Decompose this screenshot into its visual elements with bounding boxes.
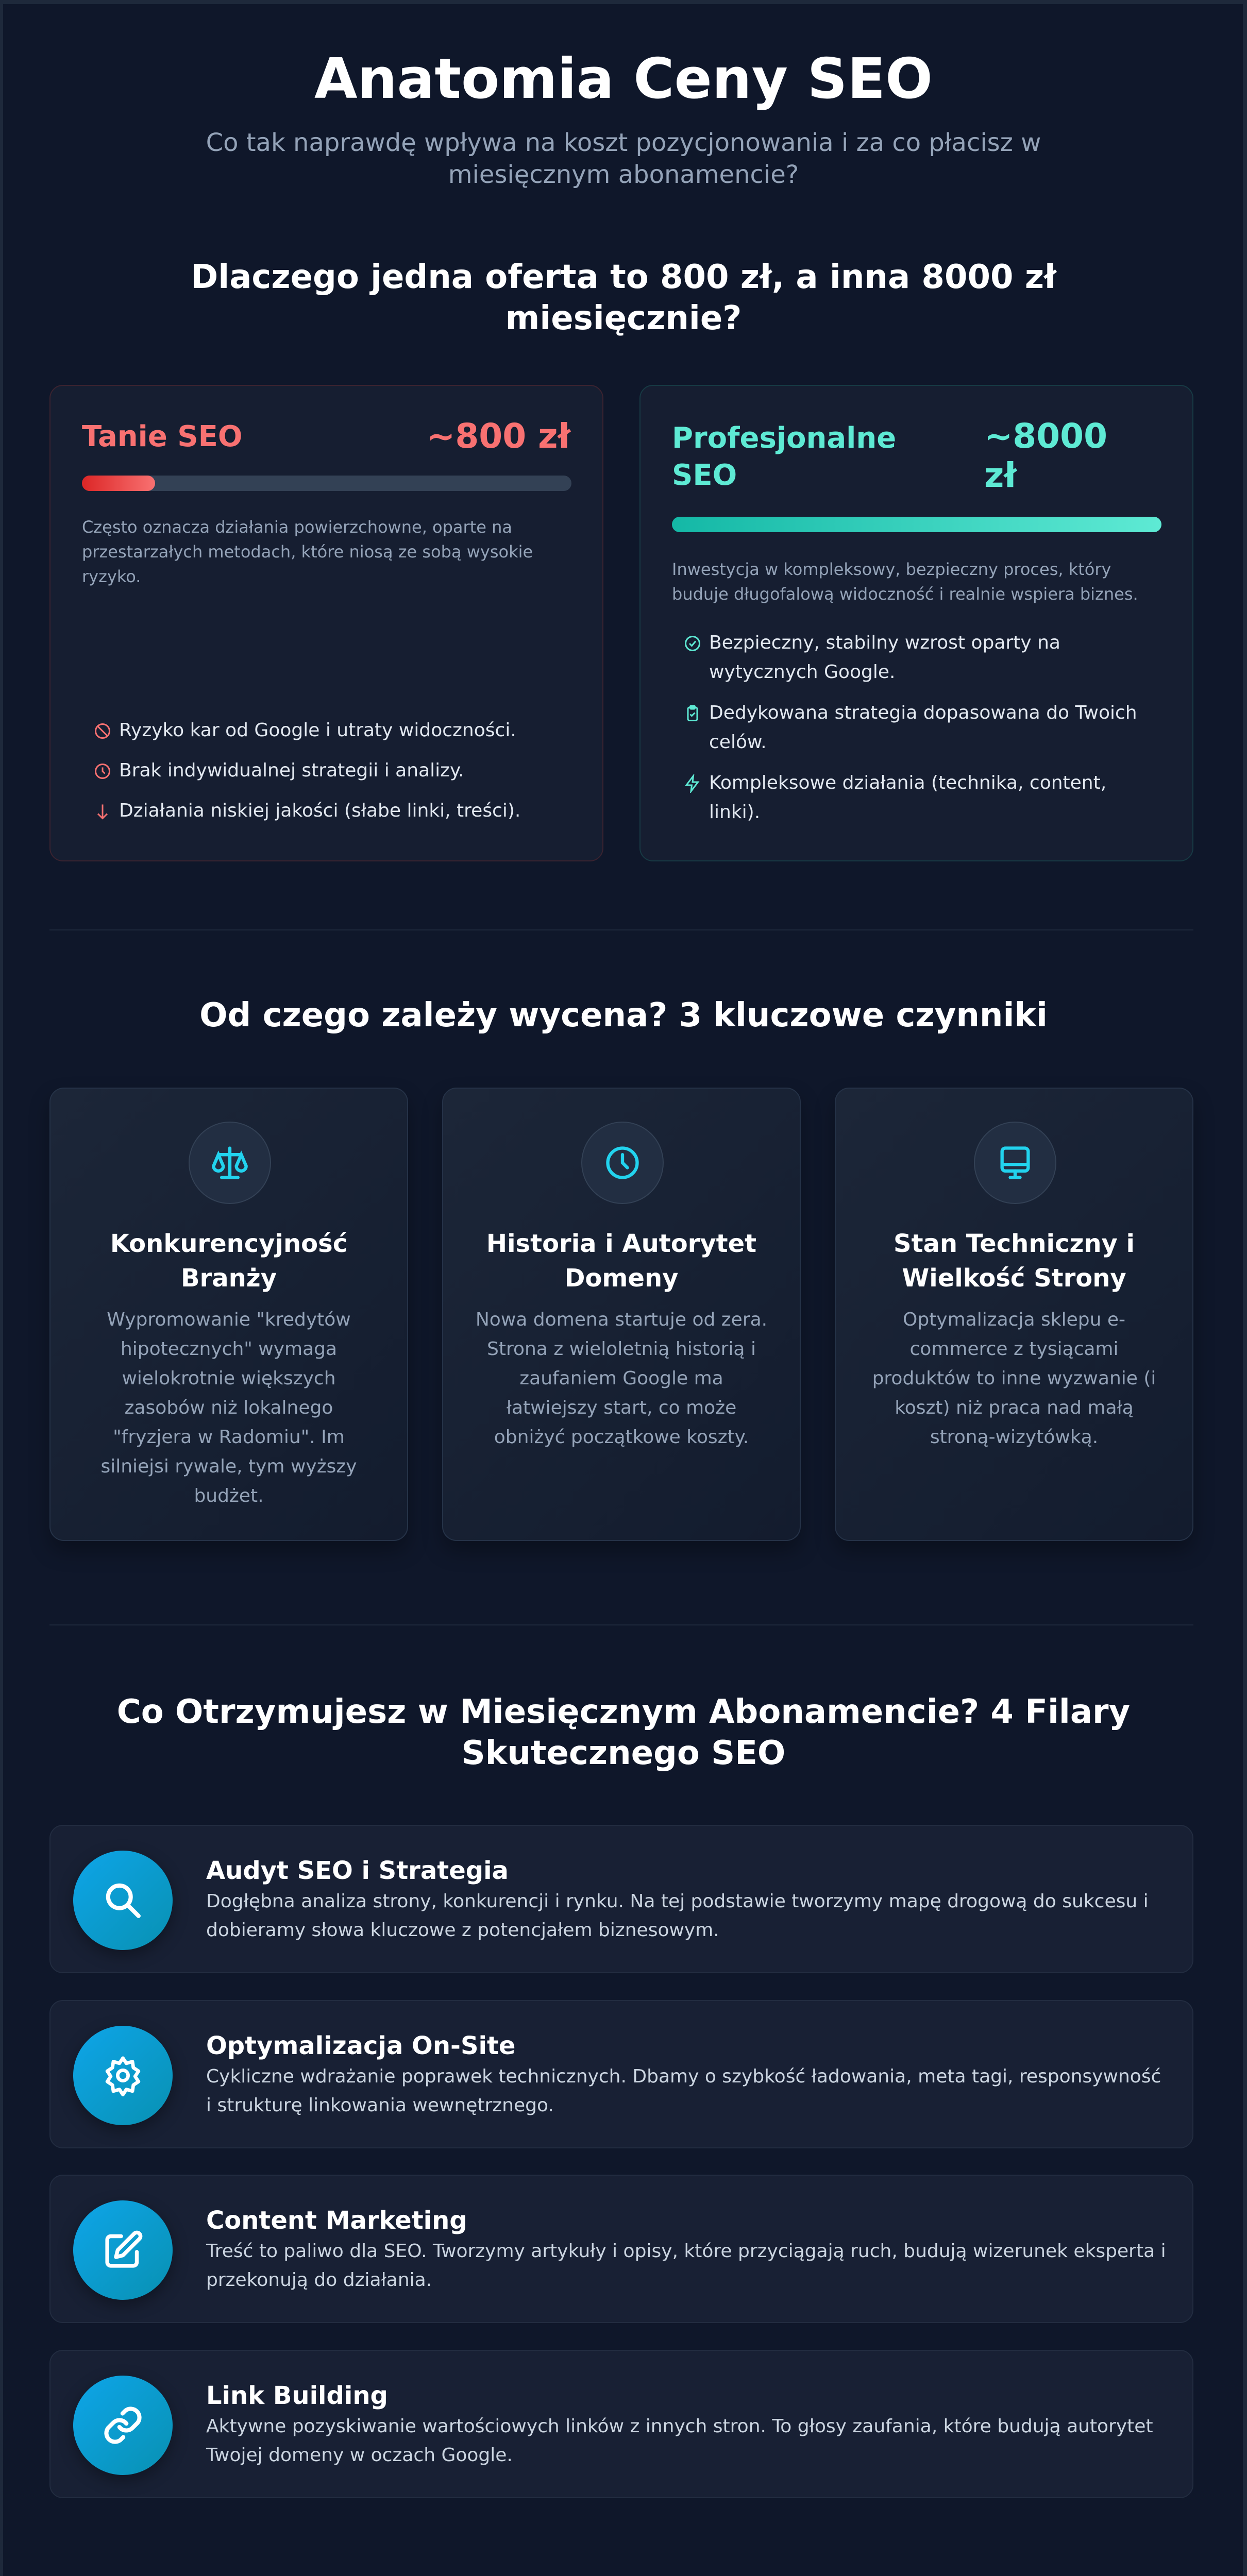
- pro title: [672, 421, 896, 492]
- benefit: safe growth: Bezpieczny, stabilny wzrost oparty na: [709, 632, 1060, 653]
- heading: price comparison: Dlaczego jedna oferta to 800 zł, a inna 8000 zł: [191, 258, 1056, 296]
- factor text: commerce z tysiącami: [910, 1338, 1118, 1360]
- cheap risk list: [95, 720, 520, 821]
- icon: edit: [73, 2200, 173, 2300]
- pro price: ~8000: [984, 416, 1107, 456]
- icon: link: [73, 2376, 173, 2475]
- risk: no strategy: Brak indywidualnej strategii i analizy.: [119, 760, 464, 781]
- icon: clock: [581, 1122, 664, 1204]
- benefit: dedicated strategy: celów.: [709, 732, 767, 753]
- factor title: [486, 1229, 756, 1293]
- cheap description: [82, 517, 533, 586]
- factor title: Wielkość Strony: [902, 1264, 1126, 1293]
- heading: pillars: Co Otrzymujesz w Miesięcznym Abonamencie? 4 Filary: [117, 1693, 1130, 1731]
- factor text: obniżyć początkowe koszty.: [494, 1427, 749, 1448]
- cheap description: Często oznacza działania powierzchowne, oparte na: [82, 517, 512, 537]
- pro title: SEO: [672, 459, 737, 492]
- factor text: stroną-wizytówką.: [930, 1427, 1098, 1448]
- pillar title: Optymalizacja On-Site: [206, 2031, 515, 2060]
- risk: low quality: Działania niskiej jakości (słabe linki, treści).: [119, 800, 520, 821]
- pillar text: [206, 1891, 1149, 1941]
- factor title: [894, 1229, 1135, 1293]
- factor text: łatwiejszy start, co może: [507, 1397, 736, 1418]
- benefit: complex actions: [685, 772, 1106, 823]
- factor card: technical state: [835, 1088, 1193, 1541]
- factor card: domain history: [442, 1088, 801, 1541]
- icon: monitor: [974, 1122, 1056, 1204]
- icon: scales: [189, 1122, 271, 1204]
- pro description: buduje długofalową widoczność i realnie wspiera biznes.: [672, 584, 1138, 604]
- cheap description: przestarzałych metodach, które niosą ze sobą wysokie: [82, 542, 533, 562]
- pillar text: Dogłębna analiza strony, konkurencji i rynku. Na tej podstawie tworzymy mapę drogową do sukcesu i: [206, 1891, 1149, 1912]
- pillar text: i strukturę linkowania wewnętrznego.: [206, 2095, 554, 2116]
- factor text: [476, 1309, 767, 1448]
- factor text: Optymalizacja sklepu e-: [903, 1309, 1125, 1330]
- factor text: [100, 1309, 357, 1506]
- heading: price comparison: miesięcznie?: [505, 299, 742, 337]
- pillar text: przekonują do działania.: [206, 2269, 432, 2291]
- factor text: produktów to inne wyzwanie (i: [872, 1368, 1156, 1389]
- factor title: Domeny: [565, 1264, 678, 1293]
- benefit: complex actions: Kompleksowe działania (technika, content,: [709, 772, 1106, 793]
- factor text: silniejsi rywale, tym wyższy: [100, 1456, 357, 1477]
- pillar text: [206, 2066, 1161, 2116]
- pillar: link building: [49, 2350, 1193, 2498]
- factor title: Stan Techniczny i: [894, 1229, 1135, 1258]
- pillar title: Content Marketing: [206, 2206, 467, 2235]
- pillar text: Twojej domeny w oczach Google.: [206, 2445, 513, 2466]
- pillar text: [206, 2416, 1153, 2466]
- cheap price: ~800 zł: [427, 416, 570, 456]
- heading: pillars: [117, 1693, 1130, 1772]
- pro description: [672, 560, 1138, 604]
- factor title: Historia i Autorytet: [486, 1229, 756, 1258]
- icon: magnifier: [73, 1851, 173, 1950]
- factor text: wielokrotnie większych: [122, 1368, 336, 1389]
- subtitle: Co tak naprawdę wpływa na koszt pozycjonowania i za co płacisz w: [206, 128, 1041, 157]
- cheap title: Tanie SEO: [82, 420, 242, 453]
- benefit: dedicated strategy: [687, 702, 1137, 753]
- factor text: koszt) niż praca nad małą: [895, 1397, 1134, 1418]
- pillar text: Cykliczne wdrażanie poprawek technicznych. Dbamy o szybkość ładowania, meta tagi, responsywność: [206, 2066, 1161, 2087]
- factor text: Nowa domena startuje od zera.: [476, 1309, 767, 1330]
- factor text: zaufaniem Google ma: [519, 1368, 723, 1389]
- factor text: budżet.: [194, 1485, 264, 1506]
- cheap description: ryzyko.: [82, 567, 141, 586]
- heading: factors: Od czego zależy wycena? 3 kluczowe czynniki: [199, 996, 1048, 1035]
- pillar: on-site: [49, 2000, 1193, 2148]
- subtitle: miesięcznym abonamencie?: [448, 160, 799, 189]
- pillar text: Aktywne pozyskiwanie wartościowych linków z innych stron. To głosy zaufania, które budują autorytet: [206, 2416, 1153, 2437]
- heading: price comparison: [191, 258, 1057, 337]
- factor title: Branży: [181, 1264, 277, 1293]
- pro benefit list: [685, 632, 1137, 823]
- pillar title: Audyt SEO i Strategia: [206, 1856, 509, 1885]
- factor title: Konkurencyjność: [110, 1229, 347, 1258]
- benefit: safe growth: [685, 632, 1060, 683]
- pillar text: [206, 2241, 1166, 2291]
- cheap bar: [82, 476, 571, 491]
- pillar: audit: [49, 1825, 1193, 1973]
- pillar title: Link Building: [206, 2381, 388, 2410]
- pillar: content: [49, 2175, 1193, 2323]
- panel: cheap SEO: [49, 385, 603, 861]
- benefit: dedicated strategy: Dedykowana strategia dopasowana do Twoich: [709, 702, 1137, 723]
- factor text: Strona z wieloletnią historią i: [487, 1338, 756, 1360]
- risk: penalties: Ryzyko kar od Google i utraty widoczności.: [119, 720, 516, 741]
- pillar text: dobieramy słowa kluczowe z potencjałem biznesowym.: [206, 1920, 719, 1941]
- icon: gear: [73, 2026, 173, 2125]
- pro title: Profesjonalne: [672, 421, 896, 455]
- factor text: hipotecznych" wymaga: [121, 1338, 337, 1360]
- pro price: zł: [984, 455, 1017, 495]
- pro bar: [672, 517, 1161, 532]
- factor card: competition: [49, 1088, 408, 1541]
- panel: professional SEO: [639, 385, 1193, 861]
- benefit: safe growth: wytycznych Google.: [709, 662, 895, 683]
- subtitle: [206, 128, 1041, 189]
- heading: pillars: Skutecznego SEO: [462, 1734, 785, 1772]
- factor text: "fryzjera w Radomiu". Im: [113, 1427, 345, 1448]
- factor text: zasobów niż lokalnego: [125, 1397, 333, 1418]
- pillar text: Treść to paliwo dla SEO. Tworzymy artykuły i opisy, które przyciągają ruch, budują wizerunek eksperta i: [206, 2241, 1166, 2262]
- factor title: [110, 1229, 347, 1293]
- factor text: Wypromowanie "kredytów: [107, 1309, 351, 1330]
- title: Anatomia Ceny SEO: [314, 47, 933, 111]
- factor text: [872, 1309, 1156, 1448]
- benefit: complex actions: linki).: [709, 802, 760, 823]
- pro price: [984, 416, 1107, 495]
- pro description: Inwestycja w kompleksowy, bezpieczny proces, który: [672, 560, 1111, 579]
